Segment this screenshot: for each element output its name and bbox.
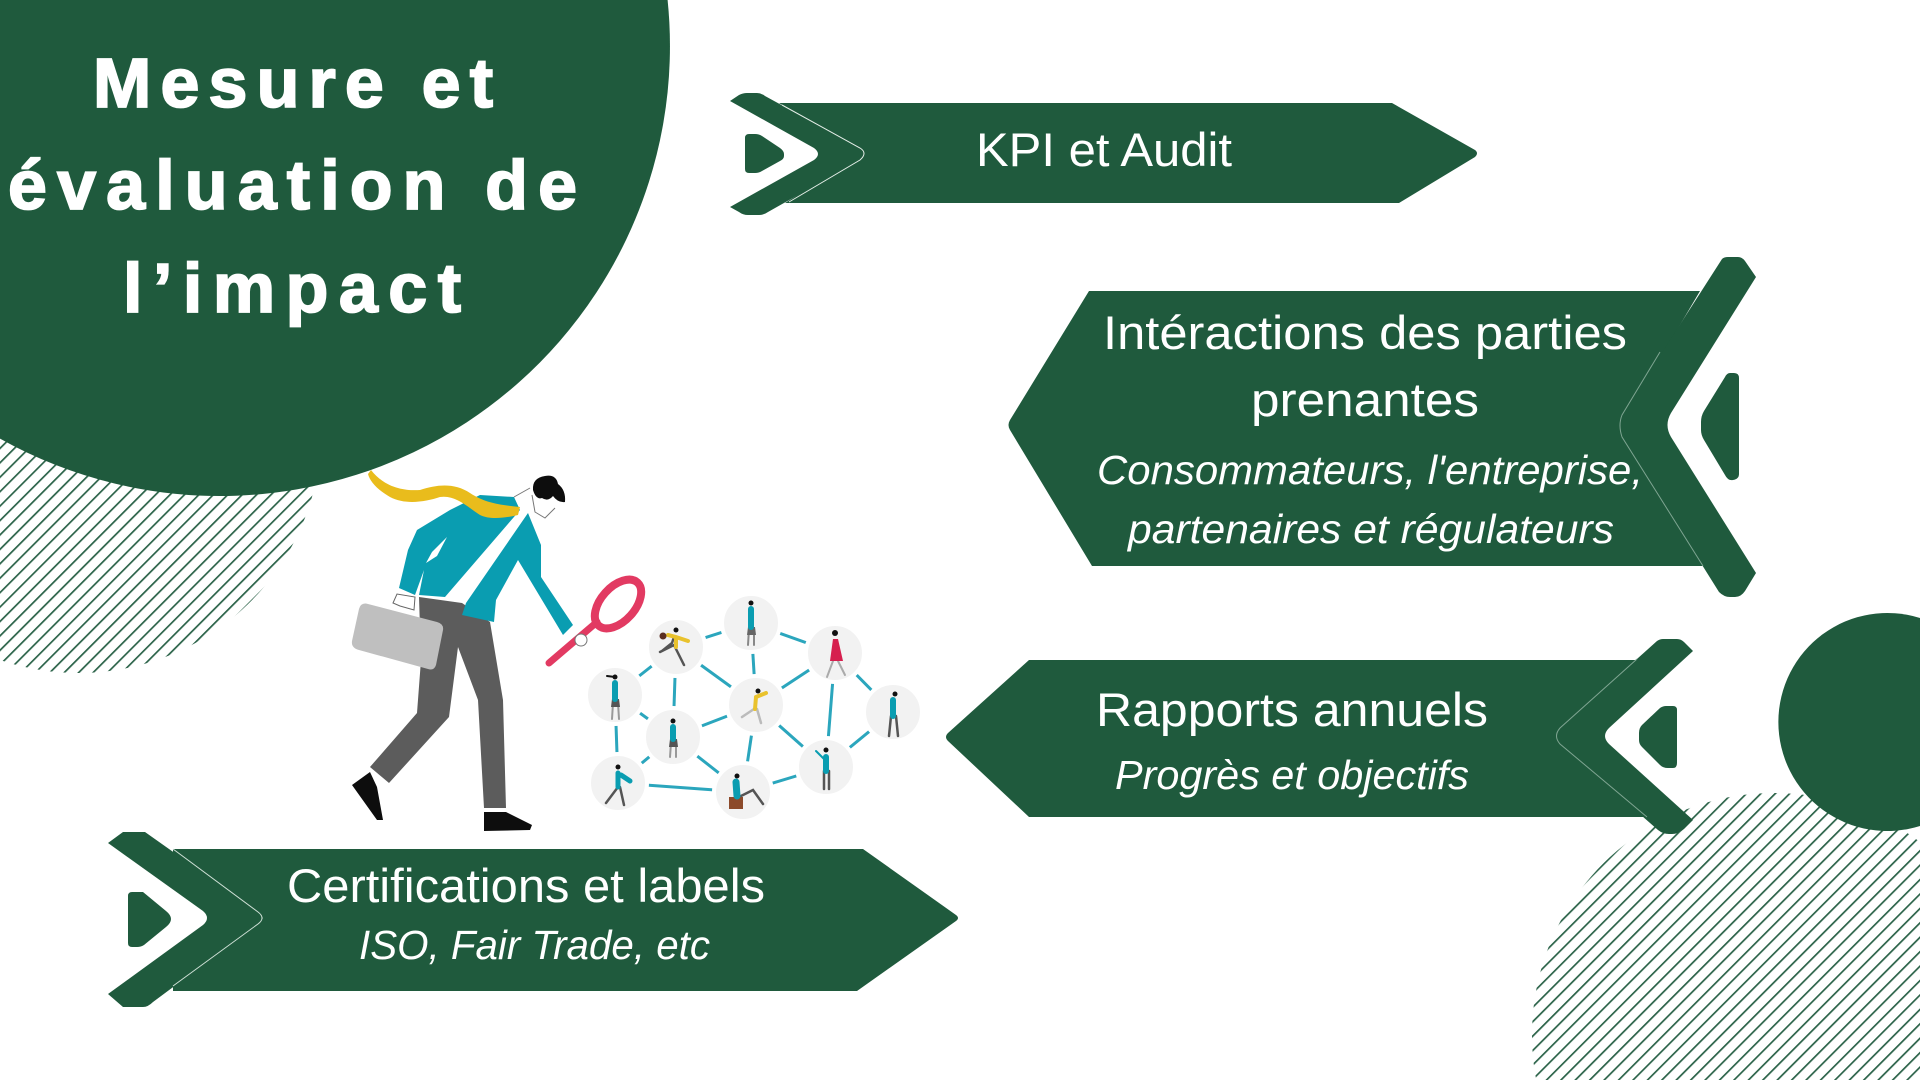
shoes	[352, 772, 532, 831]
briefcase	[352, 604, 443, 670]
illustration: man with magnifier	[352, 470, 650, 831]
label: partenaires et régulateurs	[1126, 506, 1614, 552]
title: évaluation de	[8, 146, 577, 224]
chevron icon	[1620, 257, 1756, 597]
title	[8, 44, 577, 327]
person: walking man	[606, 764, 630, 805]
person: runner	[660, 628, 688, 665]
banner: Certifications et labels	[108, 832, 958, 1007]
illustration: people network	[586, 594, 922, 821]
jacket back and arm	[399, 495, 520, 597]
label: Progrès et objectifs	[1115, 752, 1469, 798]
solid circle: right edge	[1778, 613, 1920, 831]
label: Intéractions des parties	[1103, 306, 1627, 359]
scarf	[368, 470, 520, 518]
label	[287, 859, 765, 968]
jacket front and arm	[462, 513, 573, 635]
label: ISO, Fair Trade, etc	[359, 922, 710, 968]
person: central walker	[742, 688, 766, 723]
network nodes	[586, 594, 922, 821]
hair	[533, 476, 565, 502]
person: man looking far	[889, 692, 898, 736]
title panel	[0, 0, 670, 496]
label	[1096, 683, 1488, 798]
label: Certifications et labels	[287, 859, 765, 912]
network links	[615, 623, 893, 792]
chevron icon	[1556, 639, 1693, 834]
banner: Rapports annuels	[946, 639, 1693, 834]
chevron icon	[730, 93, 864, 215]
title: l’impact	[123, 249, 461, 327]
person: woman with hand raised	[607, 674, 620, 719]
person: seated woman	[729, 774, 763, 809]
hatched circle: bottom right	[1532, 793, 1920, 1080]
person: woman centre left	[669, 718, 678, 757]
chevron icon	[108, 832, 262, 1007]
trousers	[370, 597, 506, 808]
magnifier	[549, 571, 650, 663]
person: standing woman	[747, 600, 756, 645]
label: prenantes	[1251, 373, 1479, 426]
face	[514, 488, 555, 518]
hatched circle: top left	[0, 187, 321, 673]
label: Consommateurs, l'entreprise,	[1097, 447, 1643, 493]
label	[1097, 306, 1643, 552]
label: Rapports annuels	[1096, 683, 1488, 736]
hand on case	[393, 594, 415, 610]
person: man waving	[816, 748, 829, 789]
title: Mesure et	[93, 44, 493, 122]
banner: KPI et Audit	[730, 93, 1477, 215]
title background circle	[0, 0, 670, 496]
label: KPI et Audit	[976, 123, 1232, 176]
banner: Intéractions des parties prenantes	[1008, 257, 1756, 597]
person: woman in red	[827, 630, 845, 677]
